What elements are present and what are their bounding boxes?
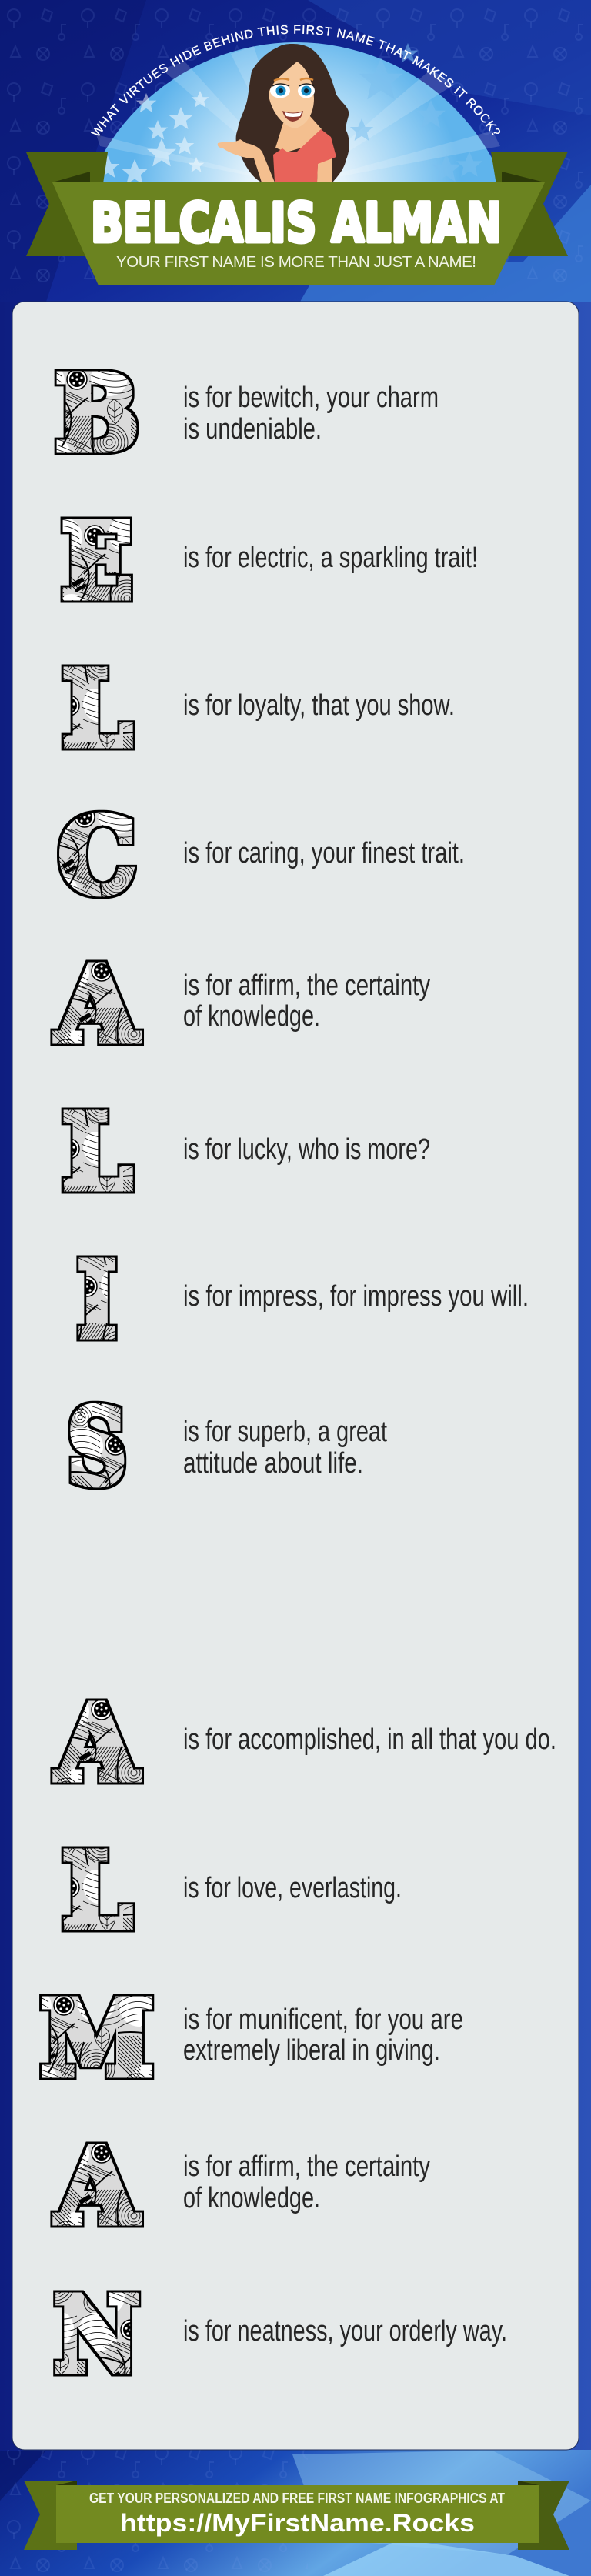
row M: M xyxy=(41,1979,153,2099)
row A: of knowledge. xyxy=(183,2182,320,2214)
footer fold right xyxy=(518,2481,539,2485)
row M: is for munificent, for you are xyxy=(183,2004,463,2036)
ribbon fold right xyxy=(502,172,545,182)
dome with star burst xyxy=(96,42,500,182)
row L xyxy=(62,1093,430,1213)
row L: L xyxy=(62,1831,132,1951)
row L: L xyxy=(62,1093,132,1213)
row M xyxy=(41,1979,463,2099)
illustration: cartoon woman xyxy=(218,44,349,182)
arched heading: WHAT VIRTUES HIDE BEHIND THIS FIRST NAME THAT MAKES IT ROCK? xyxy=(91,25,500,136)
row L: is for love, everlasting. xyxy=(183,1872,402,1904)
row I: I xyxy=(78,1240,116,1360)
row N xyxy=(55,2275,507,2395)
face xyxy=(269,62,314,128)
row I xyxy=(78,1240,529,1360)
ribbon tail left xyxy=(26,152,108,256)
row A: is for affirm, the certainty xyxy=(183,969,430,1002)
row L xyxy=(62,649,455,769)
row C xyxy=(58,796,465,916)
row B: is for bewitch, your charm xyxy=(183,382,439,414)
eyes xyxy=(270,78,315,98)
row M: extremely liberal in giving. xyxy=(183,2034,440,2067)
hair xyxy=(236,44,349,182)
ribbon tail right xyxy=(491,152,568,256)
row E xyxy=(62,502,478,622)
footer ribbon xyxy=(24,2481,569,2550)
shirt xyxy=(273,129,336,182)
subtitle: YOUR FIRST NAME IS MORE THAN JUST A NAME! xyxy=(116,253,476,271)
panel: letters xyxy=(12,302,579,2450)
ribbon main xyxy=(52,182,545,285)
row E: E xyxy=(62,502,132,622)
row E: is for electric, a sparkling trait! xyxy=(183,542,478,574)
row S: S xyxy=(68,1387,126,1507)
footer url: https://MyFirstName.Rocks xyxy=(120,2509,475,2537)
row A xyxy=(55,1683,556,1804)
row A: is for affirm, the certainty xyxy=(183,2151,430,2183)
mouth xyxy=(282,111,303,122)
row B: is undeniable. xyxy=(183,413,322,445)
row A xyxy=(55,2127,430,2247)
footer tail left xyxy=(24,2481,77,2550)
row L xyxy=(62,1831,402,1951)
row L: is for loyalty, that you show. xyxy=(183,689,455,722)
row A: A xyxy=(55,1683,139,1804)
ribbon fold left xyxy=(52,172,90,182)
row A: of knowledge. xyxy=(183,1000,320,1033)
row S: is for superb, a great xyxy=(183,1416,387,1448)
row A: A xyxy=(55,945,139,1065)
footer fold left xyxy=(56,2481,77,2485)
row S: attitude about life. xyxy=(183,1447,363,1480)
row C: C xyxy=(58,796,135,916)
row N: N xyxy=(55,2275,139,2395)
footer caption: GET YOUR PERSONALIZED AND FREE FIRST NAME INFOGRAPHICS AT xyxy=(89,2491,505,2506)
header ribbon xyxy=(26,152,568,285)
row C: is for caring, your finest trait. xyxy=(183,837,465,869)
footer tail right xyxy=(518,2481,569,2550)
footer ribbon main xyxy=(56,2485,539,2543)
row B xyxy=(55,354,439,474)
row L: L xyxy=(62,649,132,769)
neck and chest xyxy=(275,115,322,152)
row S xyxy=(68,1387,387,1507)
row B: B xyxy=(55,354,139,474)
right arm xyxy=(317,157,332,182)
row L: is for lucky, who is more? xyxy=(183,1133,430,1166)
row A: A xyxy=(55,2127,139,2247)
left arm and hand xyxy=(218,139,275,182)
row A xyxy=(55,945,430,1065)
